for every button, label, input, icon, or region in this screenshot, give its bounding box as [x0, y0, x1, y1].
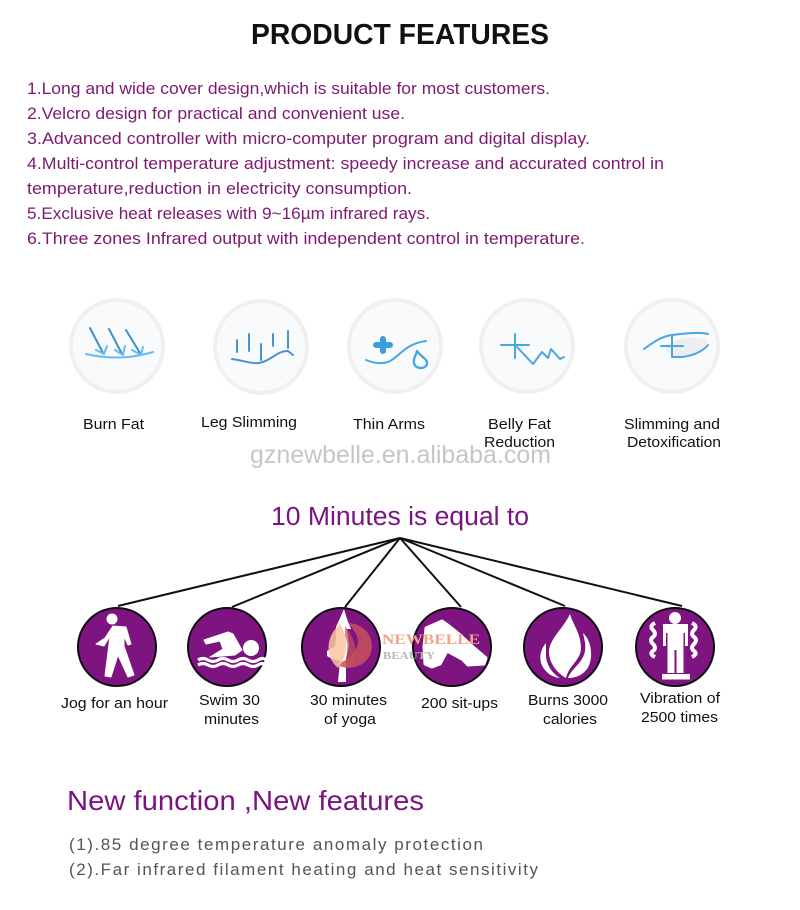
benefit labels: Thin Arms: [353, 417, 425, 433]
icon: slimming and detoxification: [626, 300, 718, 392]
benefit labels: Belly Fat: [488, 417, 551, 433]
new features list: [69, 835, 538, 879]
watermark logo: BEAUTY: [383, 650, 435, 662]
heading: 10 minutes: 10 Minutes is equal to: [271, 503, 529, 531]
feature list: 3.Advanced controller with micro-computer program and digital display.: [27, 130, 590, 148]
icon: burn fat: [71, 300, 163, 392]
watermark logo: NEWBELLE: [382, 632, 480, 648]
activity labels: Jog for an hour: [61, 696, 168, 712]
feature list: 6.Three zones Infrared output with independent control in temperature.: [27, 230, 585, 248]
icon: thin arms: [349, 300, 441, 392]
feature list: 4.Multi-control temperature adjustment: speedy increase and accurated control in: [27, 155, 664, 173]
feature list: 1.Long and wide cover design,which is suitable for most customers.: [27, 80, 550, 98]
icon: sit-ups: [413, 608, 491, 686]
watermark url: gznewbelle.en.alibaba.com: [250, 441, 551, 469]
activity labels: minutes: [204, 712, 259, 728]
activity labels: Burns 3000: [528, 693, 608, 709]
feature list: 2.Velcro design for practical and convenient use.: [27, 105, 405, 123]
icon: yoga: [302, 608, 380, 686]
activity labels: [61, 691, 721, 728]
new features list: (1).85 degree temperature anomaly protection: [69, 835, 483, 854]
feature list: 5.Exclusive heat releases with 9~16µm infrared rays.: [27, 205, 430, 223]
benefit labels: [83, 415, 721, 451]
benefit labels: Burn Fat: [83, 417, 144, 433]
benefit labels: Detoxification: [627, 435, 721, 451]
icon: belly fat: [481, 300, 573, 392]
activity labels: calories: [543, 712, 597, 728]
activity labels: Vibration of: [640, 691, 721, 707]
activity labels: 2500 times: [641, 710, 718, 726]
activity labels: 200 sit-ups: [421, 696, 498, 712]
icon: swimming: [188, 608, 266, 686]
activity labels: 30 minutes: [310, 693, 387, 709]
feature list: temperature,reduction in electricity consumption.: [27, 180, 412, 198]
new features list: (2).Far infrared filament heating and heat sensitivity: [69, 860, 538, 879]
icon: vibration: [636, 608, 714, 686]
heading: new function: New function ,New features: [67, 785, 424, 816]
watermark logo: [328, 623, 480, 668]
benefit labels: Reduction: [484, 435, 555, 451]
icon: flame: [524, 608, 602, 686]
benefit labels: Leg Slimming: [201, 415, 297, 431]
activity labels: of yoga: [324, 712, 377, 728]
panel: body benefits: [71, 300, 721, 451]
activity labels: Swim 30: [199, 693, 260, 709]
icon: jogging: [78, 608, 156, 686]
benefit labels: Slimming and: [624, 417, 720, 433]
feature list: [27, 80, 664, 248]
connector lines: [118, 538, 682, 607]
icon: leg slimming: [215, 301, 307, 393]
title: PRODUCT FEATURES: [251, 19, 549, 51]
